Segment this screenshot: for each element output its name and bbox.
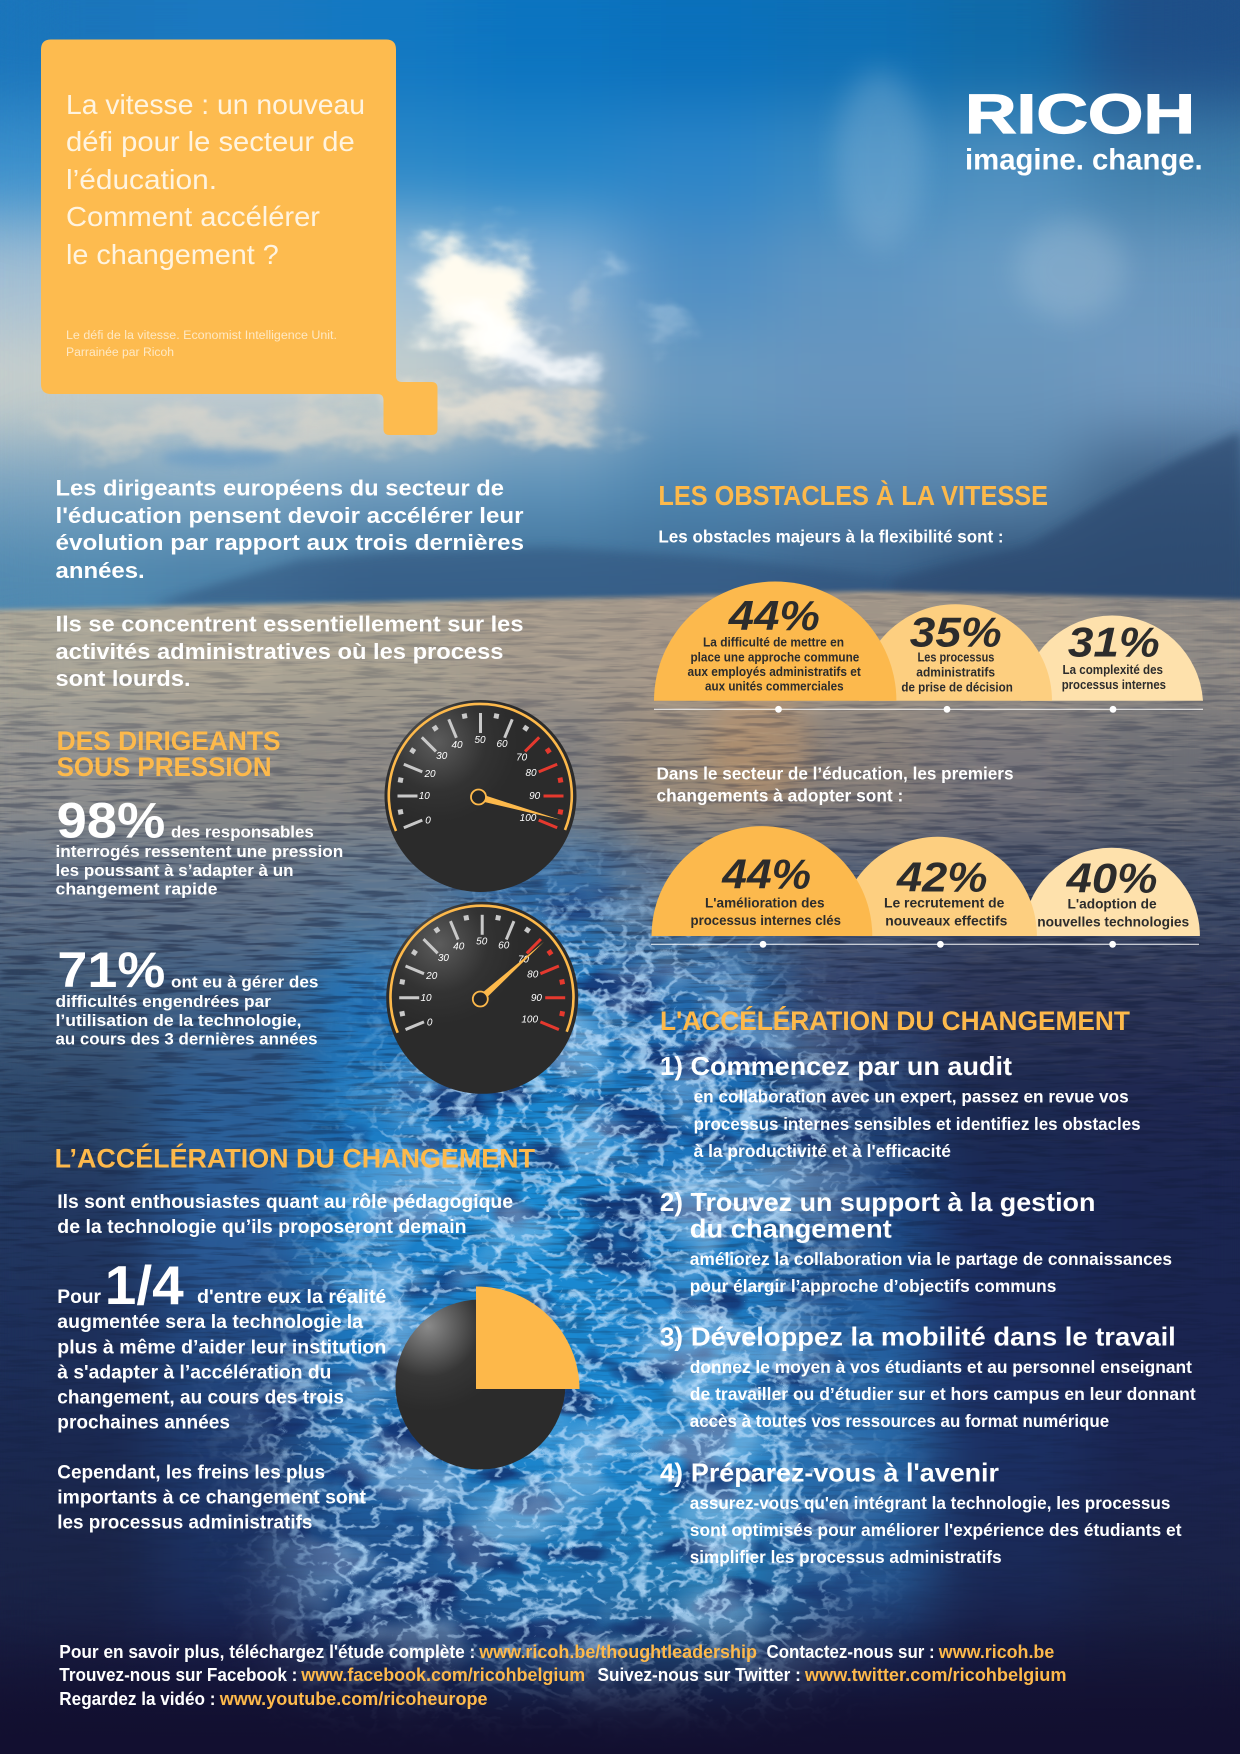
text: brakes to change: importants à ce changement sont — [57, 1486, 366, 1508]
gauge: 71% speedometer: 100 — [521, 1015, 538, 1026]
step 4: sont optimisés pour améliorer l'expérience des étudiants et — [690, 1520, 1182, 1540]
stat: 98%: changement rapide — [56, 881, 217, 899]
dome: 44%: aux unités commerciales — [705, 680, 844, 694]
gauge: 71% speedometer: 30 — [438, 953, 449, 964]
gauge: 98% speedometer: 70 — [516, 752, 528, 764]
gauge: 71% speedometer: 80 — [527, 970, 539, 981]
heading: des dirigeants sous pression: DES DIRIGEANTS — [57, 726, 281, 756]
stat: 1/4 augmented reality — [57, 1254, 386, 1434]
footer: links: www.ricoh.be/thoughtleadership — [478, 1642, 757, 1662]
step 3: Développez la mobilité dans le travail — [691, 1322, 1176, 1352]
stat: 71% — [56, 942, 318, 1048]
stat: 98%: interrogés ressentent une pression — [56, 843, 343, 861]
stat: 71%: ont eu à gérer des — [171, 974, 318, 992]
stat: 1/4 augmented reality: changement, au cours des trois — [57, 1386, 344, 1408]
intro paragraph: Les dirigeants européens du secteur de — [56, 476, 504, 501]
dome: 40%: 40% — [1066, 854, 1157, 901]
intro paragraph: sont lourds. — [56, 666, 190, 691]
pie chart: one quarter — [395, 1286, 580, 1470]
footer: links: www.youtube.com/ricoheurope — [219, 1689, 488, 1709]
stat: 1/4 augmented reality: plus à même d’aider leur institution — [57, 1336, 386, 1358]
dome: 35%: 35% — [910, 609, 1002, 656]
needle — [484, 796, 561, 820]
text: role of technology: de la technologie qu’ils proposeront demain — [57, 1216, 467, 1238]
step 4: Préparez-vous à l'avenir — [691, 1457, 999, 1487]
text: role of technology — [57, 1191, 513, 1238]
footer: links: Pour en savoir plus, téléchargez l'étude complète : — [59, 1642, 475, 1662]
subheading: obstacles: Les obstacles majeurs à la flexibilité sont : — [658, 527, 1004, 547]
dome: 31%: 31% — [1068, 619, 1160, 666]
step 3: accès à toutes vos ressources au format numérique — [690, 1411, 1109, 1431]
gauge: 71% speedometer: 70 — [518, 954, 529, 965]
dome: 42% — [838, 837, 1037, 936]
intro paragraph: Ils se concentrent essentiellement sur les — [56, 612, 524, 637]
dome: 44%: L'amélioration des — [705, 894, 825, 910]
dome: 44%: processus internes clés — [690, 912, 841, 928]
dome: 35%: Les processus — [918, 651, 994, 665]
stat: 98%: les poussant à s’adapter à un — [56, 862, 294, 880]
subheading: first changes: changements à adopter sont : — [656, 786, 903, 806]
text: brakes to change: les processus administratifs — [57, 1511, 313, 1533]
source note: Parrainée par Ricoh — [66, 347, 174, 359]
step 1: à la productivité et à l'efficacité — [694, 1141, 951, 1161]
heading: l'accélération du changement (left): L’ACCÉLÉRATION DU CHANGEMENT — [55, 1143, 535, 1174]
title text: La vitesse : un nouveau — [66, 89, 365, 120]
stat: 98%: des responsables — [171, 824, 314, 842]
stat: 71%: 71% — [57, 942, 165, 998]
heading: des dirigeants sous pression: SOUS PRESSION — [57, 752, 272, 782]
footer: links: www.facebook.com/ricohbelgium — [300, 1665, 585, 1685]
title text — [66, 89, 365, 270]
title text: défi pour le secteur de — [66, 126, 355, 157]
text: brakes to change: Cependant, les freins les plus — [57, 1461, 325, 1483]
source note — [66, 330, 337, 359]
box shape with tab — [41, 40, 438, 435]
stat: 1/4 augmented reality: Pour — [57, 1286, 101, 1308]
text: brakes to change — [57, 1461, 366, 1533]
stat: 71%: difficultés engendrées par — [56, 993, 272, 1011]
step 2: 2) — [660, 1187, 683, 1217]
stat: 98% — [56, 793, 343, 899]
gauge: 98% speedometer: 20 — [423, 769, 436, 780]
stat: 1/4 augmented reality: 1/4 — [105, 1254, 184, 1316]
gauge: 98% speedometer: 50 — [474, 735, 486, 746]
title text: Comment accélérer — [66, 201, 320, 232]
footer: links: Suivez-nous sur Twitter : — [598, 1665, 801, 1685]
gauge: 98% speedometer: 10 — [419, 791, 430, 802]
step 4: assurez-vous qu'en intégrant la technologie, les processus — [690, 1493, 1171, 1513]
intro paragraph: activités administratives où les process — [56, 639, 504, 664]
gauge: 98% speedometer: 100 — [520, 813, 537, 824]
step 4: 4) — [660, 1457, 683, 1487]
gauge: 71% speedometer: 50 — [476, 937, 488, 948]
stat: 71%: l’utilisation de la technologie, — [56, 1012, 302, 1030]
dome: 44%: aux employés administratifs et — [688, 665, 862, 679]
step 1: processus internes sensibles et identifiez les obstacles — [694, 1114, 1141, 1134]
gauge: 98% speedometer: 90 — [529, 791, 541, 802]
chart: obstacles domes — [654, 582, 1203, 713]
heading: les obstacles à la vitesse: LES OBSTACLES À LA VITESSE — [658, 480, 1048, 511]
intro paragraph — [56, 476, 524, 691]
title text: le changement ? — [66, 239, 279, 270]
logo: Ricoh imagine. change.: RICOH — [965, 82, 1195, 145]
logo: Ricoh imagine. change. — [965, 82, 1203, 176]
gauge: 98% speedometer: 80 — [525, 768, 537, 779]
dome: 44%: 44% — [728, 592, 820, 639]
stat: 1/4 augmented reality: augmentée sera la technologie la — [57, 1311, 363, 1333]
stat: 1/4 augmented reality: à s'adapter à l’accélération du — [57, 1361, 331, 1383]
gauge: 71% speedometer: 40 — [453, 942, 465, 953]
dome: 40%: L'adoption de — [1068, 896, 1157, 912]
footer: links: Trouvez-nous sur Facebook : — [59, 1665, 297, 1685]
stat: 71%: au cours des 3 dernières années — [56, 1030, 318, 1048]
step 3: de travailler ou d’étudier sur et hors campus en leur donnant — [690, 1384, 1196, 1404]
step 2: du changement — [690, 1214, 892, 1244]
chart: changes domes — [651, 826, 1200, 948]
gauge: 71% speedometer — [386, 902, 578, 1094]
stat: 1/4 augmented reality: prochaines années — [57, 1412, 230, 1434]
dome: 44%: 44% — [721, 850, 811, 897]
dome: 44% — [652, 826, 872, 936]
dome: 31%: La complexité des — [1062, 663, 1163, 677]
dome: 42%: nouveaux effectifs — [885, 913, 1008, 929]
gauge: 98% speedometer: 30 — [436, 751, 448, 762]
dome: 44%: La difficulté de mettre en — [703, 636, 844, 650]
heading: l'accélération du changement (right): L'ACCÉLÉRATION DU CHANGEMENT — [660, 1005, 1130, 1036]
text: role of technology: Ils sont enthousiastes quant au rôle pédagogique — [57, 1191, 513, 1213]
heading: des dirigeants sous pression — [57, 726, 281, 782]
dome: 40% — [1023, 848, 1200, 936]
dome: 35%: de prise de décision — [901, 681, 1013, 695]
step 4 — [660, 1457, 1182, 1567]
step 3 — [660, 1322, 1196, 1431]
step 1: 1) — [660, 1051, 683, 1081]
dome: 40%: nouvelles technologies — [1037, 913, 1189, 929]
dome: 42%: Le recrutement de — [884, 895, 1005, 911]
stat: 1/4 augmented reality: d'entre eux la réalité — [197, 1286, 386, 1308]
step 2 — [660, 1187, 1172, 1296]
footer: links: Regardez la vidéo : — [59, 1689, 215, 1709]
step 4: simplifier les processus administratifs — [690, 1547, 1002, 1567]
needle hub — [473, 992, 488, 1006]
dome: 31%: processus internes — [1062, 678, 1166, 692]
step 1: Commencez par un audit — [690, 1051, 1012, 1081]
logo: Ricoh imagine. change.: imagine. change. — [965, 143, 1203, 176]
dome: 42%: 42% — [896, 854, 988, 901]
gauge: 71% speedometer: 10 — [420, 993, 432, 1004]
footer: links: www.twitter.com/ricohbelgium — [804, 1665, 1066, 1685]
intro paragraph: années. — [56, 558, 145, 583]
dome: 35%: administratifs — [916, 666, 995, 680]
step 3: 3) — [660, 1322, 683, 1352]
gauge: 71% speedometer: 0 — [427, 1017, 433, 1028]
panel: title speech box — [41, 40, 438, 435]
footer: links: Contactez-nous sur : — [766, 1642, 935, 1662]
intro paragraph: l'éducation pensent devoir accélérer leur — [56, 503, 524, 528]
needle hub — [471, 790, 486, 804]
subheading: first changes: Dans le secteur de l’éducation, les premiers — [656, 763, 1014, 783]
gauge: 71% speedometer: 60 — [498, 941, 510, 952]
step 2: Trouvez un support à la gestion — [690, 1187, 1095, 1217]
gauge: 71% speedometer: 20 — [425, 971, 438, 982]
gauge: 98% speedometer: 0 — [425, 816, 431, 826]
step 1 — [660, 1051, 1141, 1161]
intro paragraph: évolution par rapport aux trois dernières — [56, 530, 524, 555]
step 2: améliorez la collaboration via le partage de connaissances — [690, 1249, 1172, 1269]
gauge: 98% speedometer: 60 — [496, 739, 508, 750]
gauge: 71% speedometer: 90 — [531, 993, 542, 1004]
footer: links: www.ricoh.be — [938, 1642, 1054, 1662]
title text: l’éducation. — [66, 164, 217, 195]
source note: Le défi de la vitesse. Economist Intelligence Unit. — [66, 330, 337, 342]
step 1: en collaboration avec un expert, passez en revue vos — [694, 1086, 1129, 1106]
dome: 44%: place une approche commune — [690, 651, 859, 665]
dome: 31% — [1021, 616, 1203, 701]
gauge: 98% speedometer: 40 — [451, 740, 463, 751]
dome: 35% — [859, 604, 1052, 701]
subheading: first changes — [656, 763, 1014, 806]
step 3: donnez le moyen à vos étudiants et au personnel enseignant — [690, 1357, 1192, 1377]
footer: links — [59, 1642, 1067, 1709]
step 2: pour élargir l’approche d’objectifs communs — [690, 1276, 1057, 1296]
stat: 98%: 98% — [57, 793, 165, 849]
dome: 44% — [654, 582, 896, 701]
needle — [483, 942, 544, 997]
gauge: 98% speedometer — [384, 700, 576, 892]
